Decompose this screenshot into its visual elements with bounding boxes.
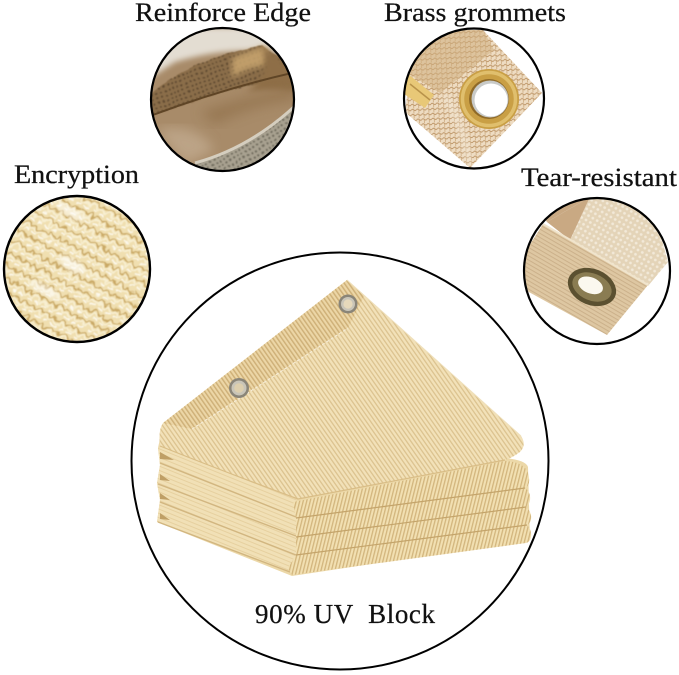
- label: Tear-resistant: Tear-resistant: [521, 163, 678, 192]
- stack base: [157, 424, 530, 576]
- top folded sheet: [159, 280, 524, 499]
- main circle outline: [132, 252, 548, 670]
- left fold edges: [157, 446, 296, 574]
- hem bands: [163, 280, 364, 429]
- folded stack of fabric: [157, 424, 531, 576]
- icon: brass grommet: [459, 69, 519, 129]
- panel: brass grommet close-up: [404, 28, 544, 170]
- panel: main folded shade cloth: [132, 252, 548, 670]
- panel: encryption weave close-up: [2, 194, 152, 344]
- icon: left grommet: [229, 378, 249, 398]
- panel: reinforced edge close-up: [150, 27, 296, 173]
- label: Encryption: Encryption: [14, 160, 139, 189]
- icon: top grommet: [338, 294, 358, 314]
- label: 90% UV Block: 90% UV Block: [255, 599, 436, 629]
- stacked fold bands: [293, 461, 529, 518]
- icon: dark grommet: [562, 261, 622, 313]
- panel: tear-resistant close-up: [520, 197, 671, 345]
